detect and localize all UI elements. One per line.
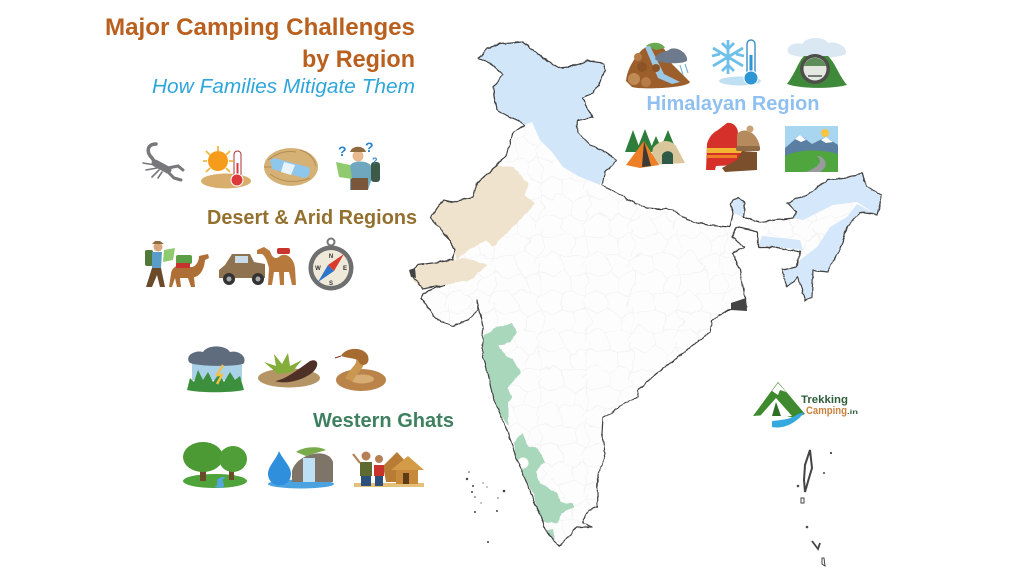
icon: cloud and altitude gauge <box>787 38 847 88</box>
icon: leech on ground <box>258 353 320 388</box>
logo wordmark: Trekking <box>801 394 848 406</box>
title: Major Camping Challenges <box>105 14 415 41</box>
title: by Region <box>302 46 415 73</box>
map: dark coastal patches <box>409 268 747 311</box>
icon: compass: W <box>315 266 321 272</box>
map region: Himalayan north <box>479 42 617 185</box>
icon: tents <box>625 129 685 168</box>
map region: Western Ghats <box>483 324 573 541</box>
icon: jacket, hat and boots <box>706 123 760 172</box>
icon: compass: S <box>329 281 333 287</box>
icon: rainstorm over forest <box>187 346 245 392</box>
logo mark <box>753 382 805 428</box>
icon: landslide <box>626 43 690 88</box>
icon: local family and huts <box>353 452 424 487</box>
map of India <box>400 30 890 566</box>
icon: compass: N <box>329 254 333 260</box>
icon: lost hiker with map: ? <box>338 143 347 159</box>
title <box>105 14 415 73</box>
logo: TrekkingCamping.in: Camping <box>806 405 847 417</box>
logo: TrekkingCamping.in <box>753 382 859 428</box>
subtitle: How Families Mitigate Them <box>152 76 415 98</box>
map: landmass with district lines <box>422 124 864 542</box>
icon: compass <box>308 238 354 290</box>
heading: Desert and Arid Regions: Desert & Arid Regions <box>207 206 417 229</box>
icon: hiker with camel <box>145 241 209 287</box>
icon: lost hiker with map: ? <box>372 156 378 166</box>
map: Lakshadweep islands <box>466 471 505 543</box>
heading: Himalayan Region: Himalayan Region <box>646 92 820 115</box>
icon: compass: E <box>343 266 347 272</box>
map region: desert and arid <box>412 165 535 289</box>
map: national outline <box>410 42 882 546</box>
heading: Western Ghats: Western Ghats <box>313 409 454 432</box>
map: Andaman and Nicobar islands <box>797 450 832 566</box>
icon: water drop and waterfall <box>268 447 334 488</box>
map region: Himalayan north-east <box>732 173 882 300</box>
icon: water bottle on dry ground <box>264 148 318 186</box>
icon: scorpion <box>143 144 183 180</box>
icon: sun and thermometer <box>201 146 251 188</box>
icon: snowflake and thermometer <box>712 40 761 86</box>
icon: lost hiker with map: ? <box>365 139 374 155</box>
icon: lost hiker with map <box>336 139 380 190</box>
icon: coiled snake <box>335 349 386 391</box>
logo: TrekkingCamping.in: .in <box>847 410 859 416</box>
icon: trees and stream <box>183 442 247 488</box>
icon: mountain road landscape <box>785 126 838 172</box>
icon: jeep and camel <box>219 247 296 285</box>
